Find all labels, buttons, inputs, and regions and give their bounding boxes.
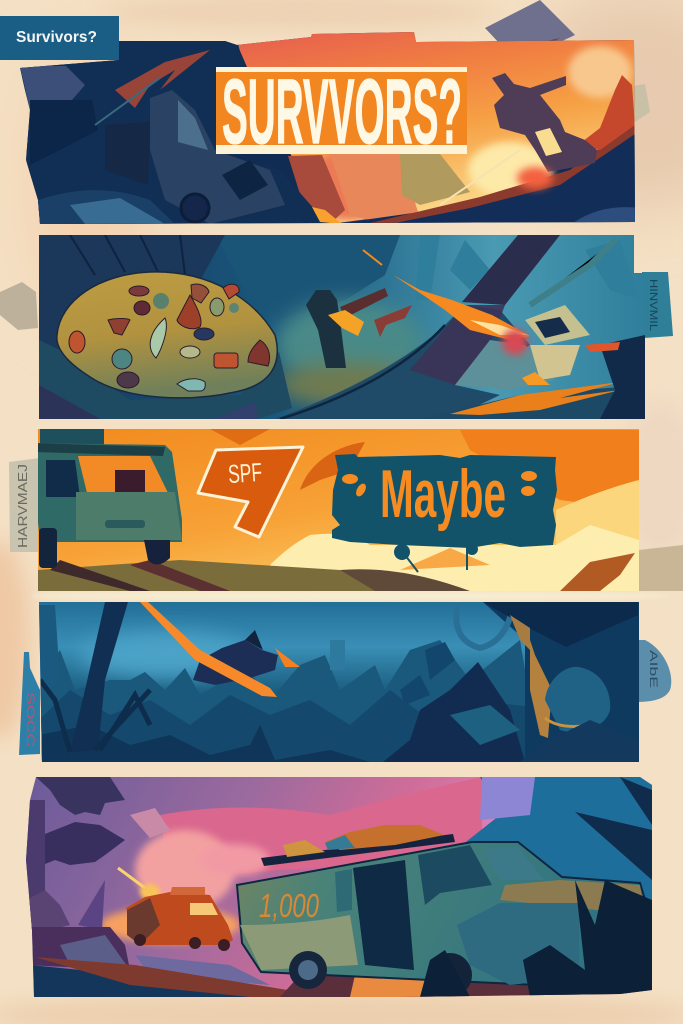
bowl foreground bbox=[39, 340, 292, 419]
panel: SPF sign and Maybe billboard bbox=[30, 428, 639, 591]
ground under big van bbox=[280, 976, 652, 997]
fire streak bbox=[393, 275, 530, 340]
bottom right dark slope bbox=[335, 130, 635, 225]
sparks and plants bbox=[450, 382, 620, 415]
small orange van bbox=[126, 892, 233, 945]
scrap notes around panels bbox=[0, 0, 683, 755]
explosion ember bbox=[312, 207, 342, 224]
vehicle bbox=[193, 640, 278, 685]
van bbox=[40, 428, 104, 445]
red flare right bbox=[584, 75, 634, 150]
panel: sunset escape vans bbox=[26, 777, 652, 997]
Maybe billboard: Maybe bbox=[380, 456, 506, 532]
header tag: Survivors? bbox=[16, 29, 97, 46]
left leaves bbox=[36, 777, 125, 815]
panel: crash and explosion bbox=[18, 30, 640, 225]
tree trunk bbox=[76, 602, 128, 730]
mech figure bbox=[492, 73, 597, 172]
scrap notes around panels: AIbE bbox=[647, 650, 659, 688]
scrap notes around panels: HARVMAEJ bbox=[15, 464, 30, 548]
SPF sign: SPF bbox=[227, 457, 263, 489]
big van bbox=[237, 842, 649, 987]
laser streak bbox=[140, 602, 277, 697]
panel: jungle pursuit bbox=[39, 602, 639, 762]
roof rack and luggage bbox=[261, 834, 455, 866]
panel: cookie-shaped asteroid and gunman bbox=[39, 235, 645, 419]
flying debris bbox=[118, 868, 145, 888]
title banner bbox=[216, 61, 467, 163]
foliage patches bbox=[416, 235, 604, 300]
scrap notes around panels: SOCC bbox=[24, 692, 36, 747]
dark lower slope bbox=[275, 305, 530, 419]
SPF sign bbox=[198, 447, 303, 537]
dark wreck side bbox=[20, 40, 330, 224]
gunman bbox=[306, 290, 346, 368]
background foliage bbox=[39, 640, 540, 762]
foreground dark plants bbox=[523, 880, 652, 997]
foreground figure bbox=[483, 602, 639, 762]
buildings bbox=[462, 777, 652, 900]
cookie bbox=[57, 272, 277, 398]
ground bbox=[38, 560, 375, 591]
van number: 1,000 bbox=[259, 887, 319, 924]
Maybe billboard bbox=[332, 454, 557, 572]
header tag bbox=[0, 16, 119, 60]
wrecked vehicle bbox=[525, 305, 590, 345]
scrap notes around panels: HINVMIL bbox=[647, 279, 659, 331]
trunk bbox=[462, 235, 560, 305]
explosion sky bbox=[237, 30, 640, 224]
dark overhang bbox=[64, 235, 225, 310]
